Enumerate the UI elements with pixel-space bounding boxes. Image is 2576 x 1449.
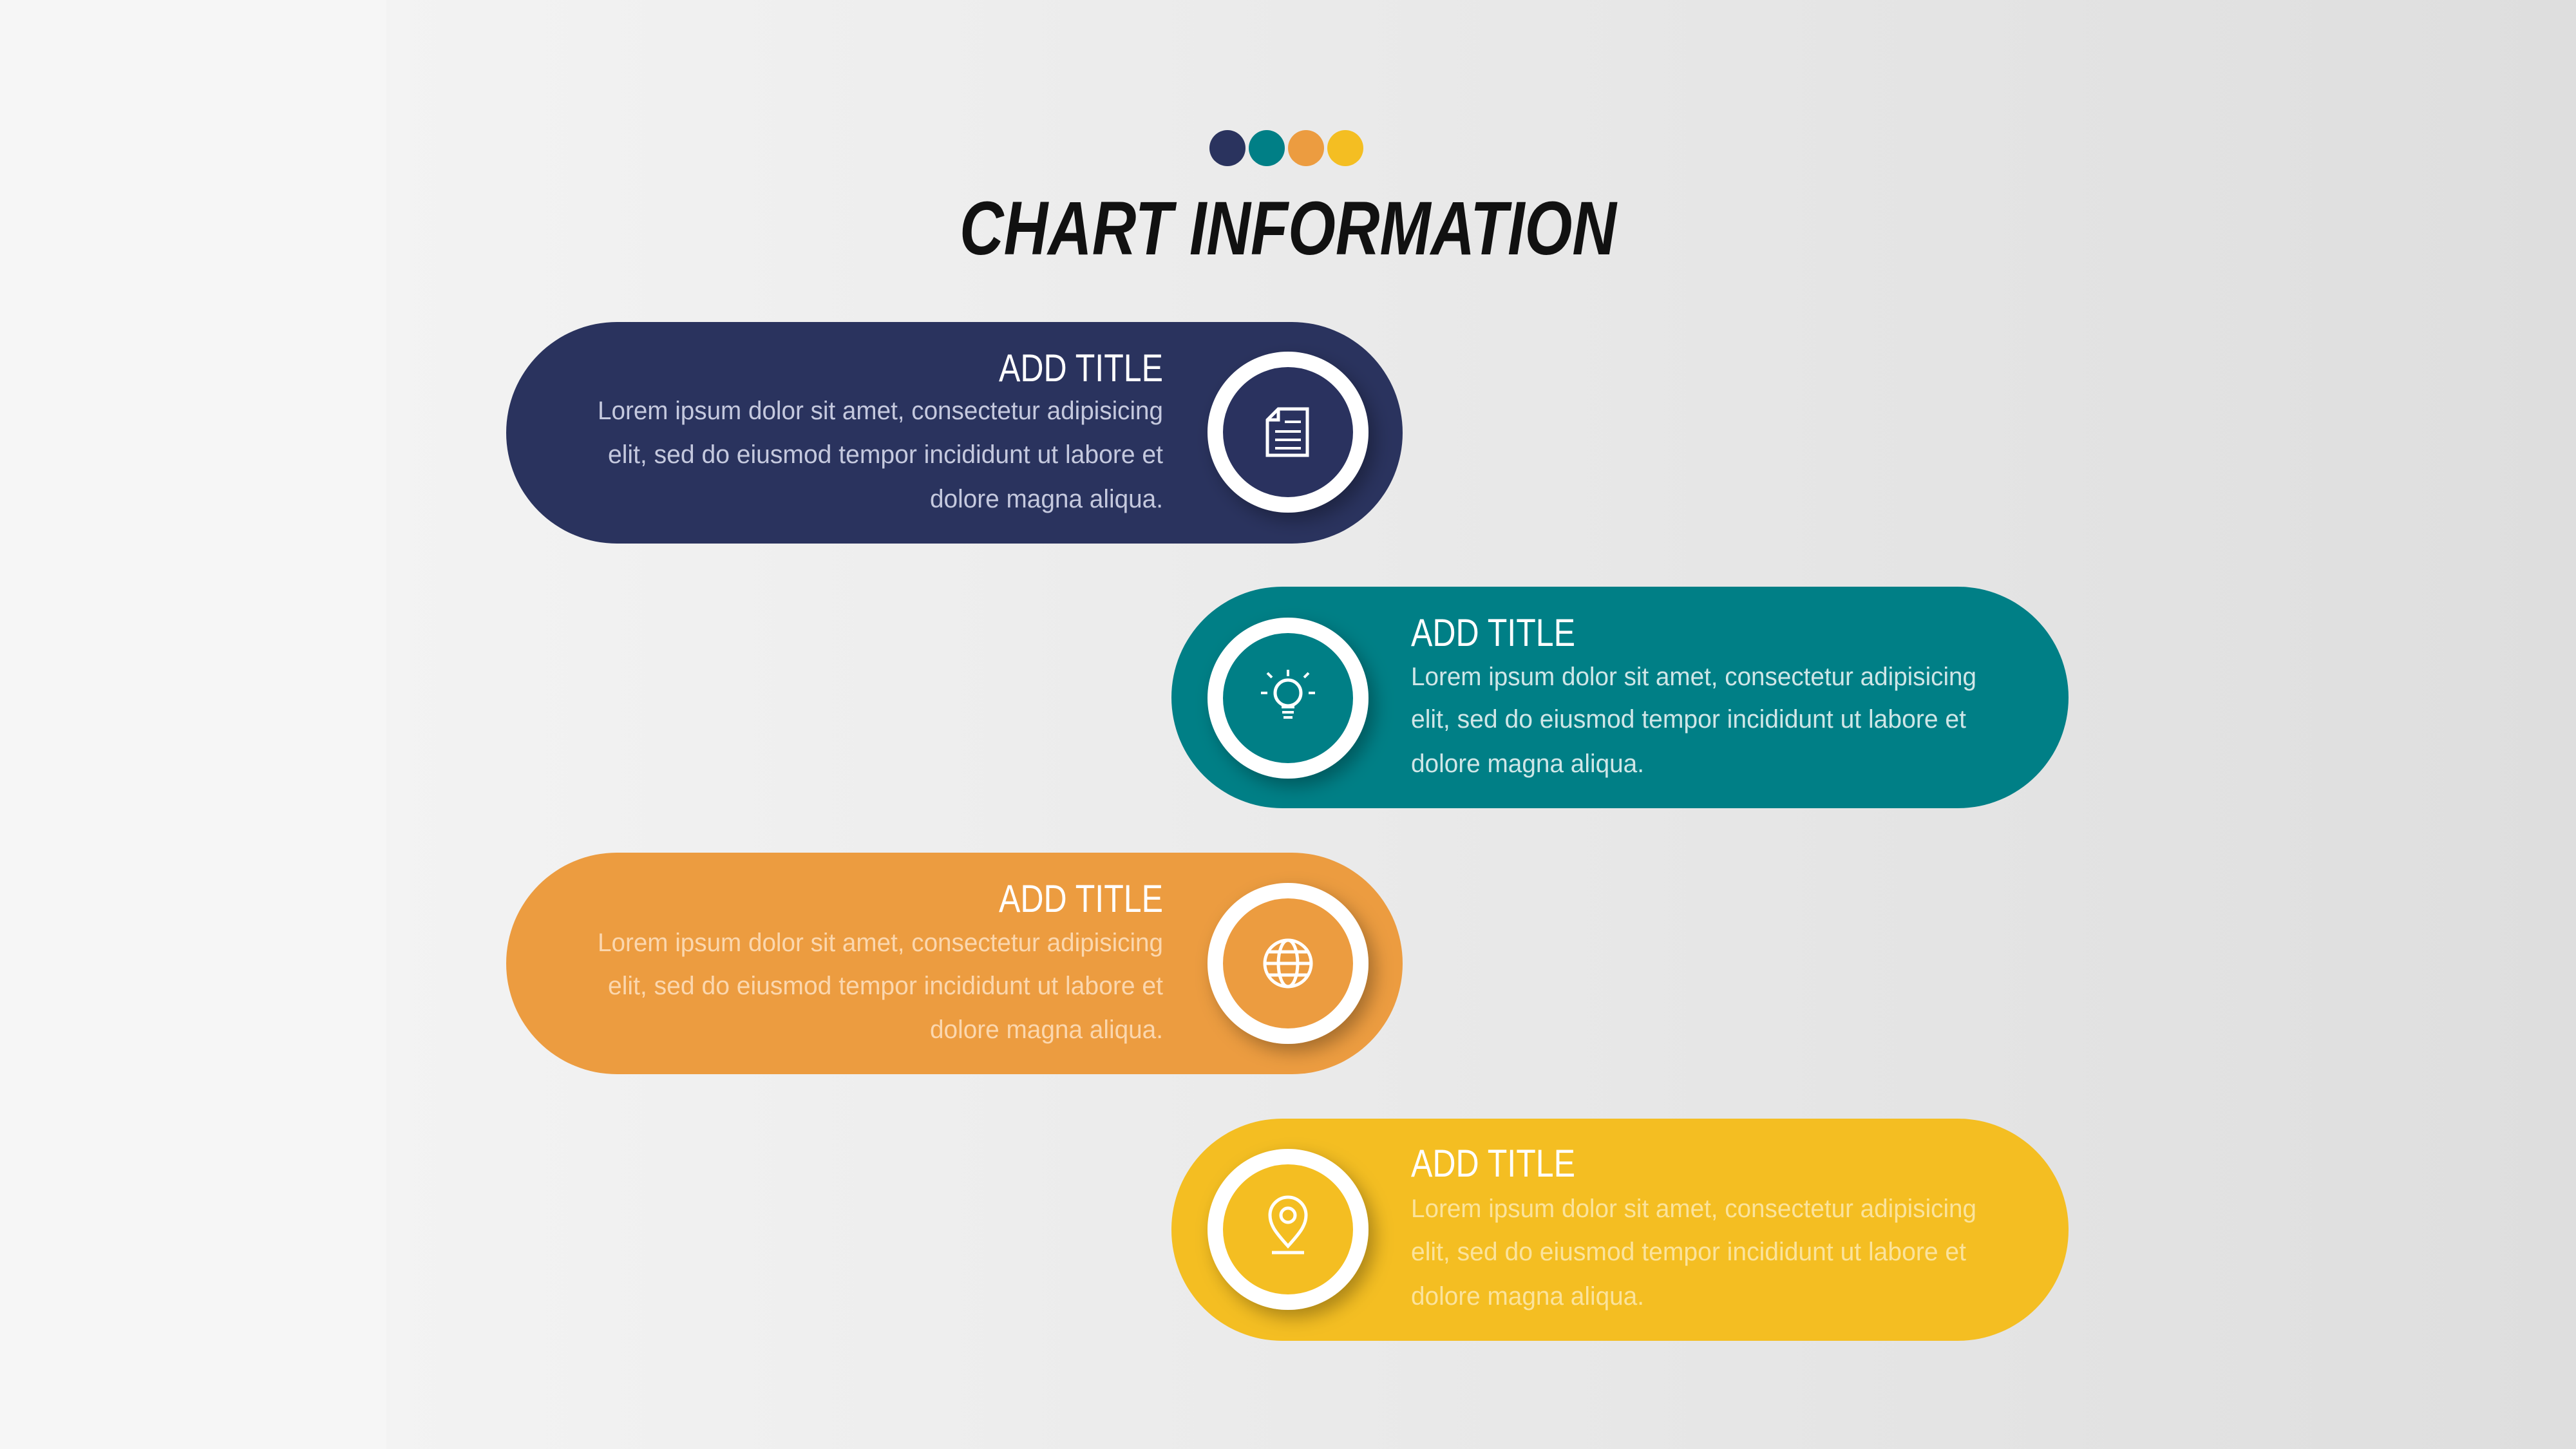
panel 2: dolore magna aliqua. [1411, 750, 1644, 778]
icon: light bulb [1215, 625, 1361, 771]
panel 4 [1171, 1119, 2069, 1341]
panel 3: dolore magna aliqua. [930, 1016, 1163, 1044]
panel 4: Lorem ipsum dolor sit amet, consectetur adipisicing [1411, 1195, 1976, 1223]
panel 2 [1171, 587, 2069, 808]
panel 1 [506, 322, 1403, 544]
panel 3: ADD TITLE [999, 877, 1163, 920]
panel 2: Lorem ipsum dolor sit amet, consectetur adipisicing [1411, 663, 1976, 691]
panel 2: ADD TITLE [1411, 611, 1575, 654]
icon: document [1215, 359, 1361, 505]
panel 2: elit, sed do eiusmod tempor incididunt ut labore et [1411, 705, 1966, 734]
panel 3: elit, sed do eiusmod tempor incididunt ut labore et [608, 972, 1163, 1000]
panel 1: elit, sed do eiusmod tempor incididunt ut labore et [608, 440, 1163, 469]
dots [1209, 130, 1363, 166]
panel 4: elit, sed do eiusmod tempor incididunt ut labore et [1411, 1238, 1966, 1266]
panel 1: dolore magna aliqua. [930, 485, 1163, 513]
icon: location pin [1215, 1157, 1361, 1302]
panel 1: ADD TITLE [999, 346, 1163, 390]
panel 1: Lorem ipsum dolor sit amet, consectetur adipisicing [598, 397, 1163, 425]
panel 4: ADD TITLE [1411, 1142, 1575, 1185]
icon: globe [1215, 891, 1361, 1036]
panel 4: dolore magna aliqua. [1411, 1282, 1644, 1311]
panel 3: Lorem ipsum dolor sit amet, consectetur adipisicing [598, 929, 1163, 957]
panel 3 [506, 853, 1403, 1074]
title: CHART INFORMATION [960, 186, 1618, 271]
